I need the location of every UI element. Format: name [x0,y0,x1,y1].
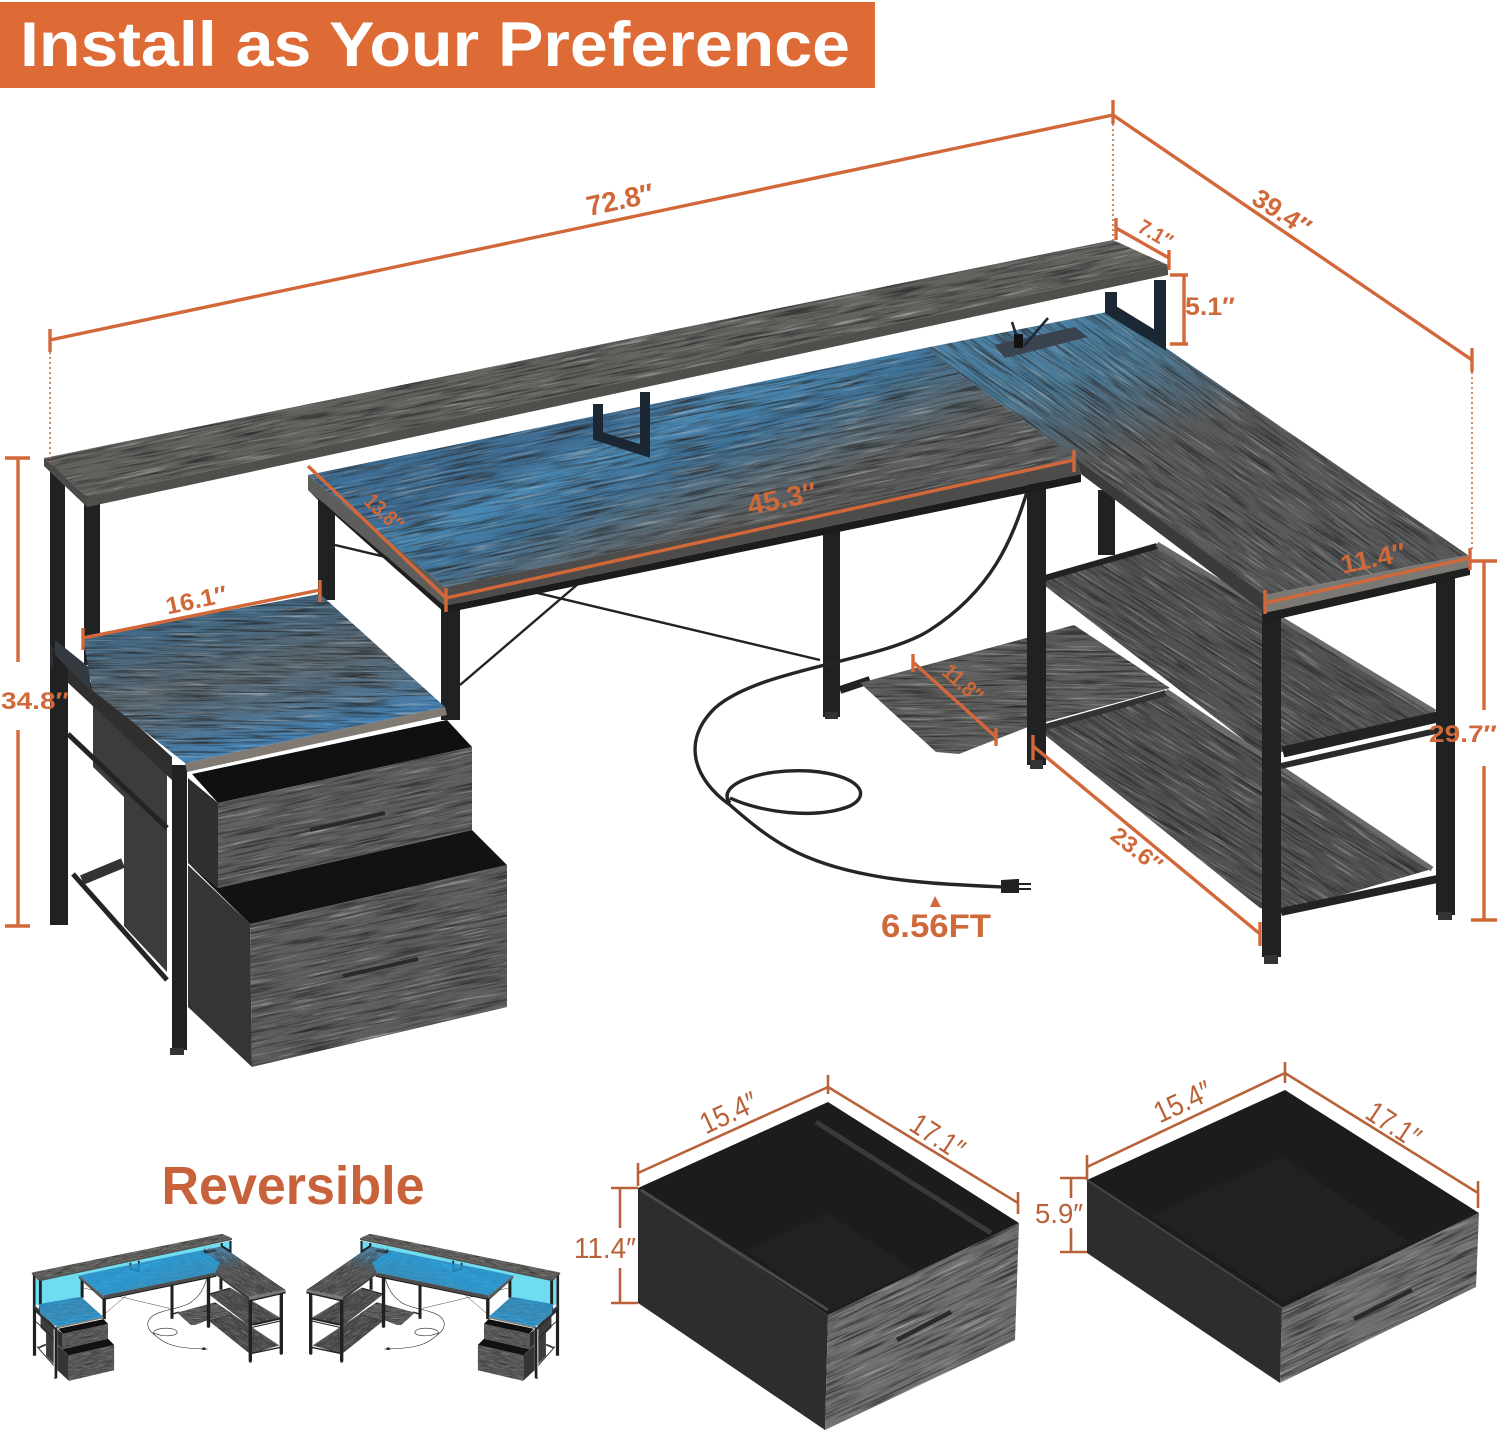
dimension 72.8 [50,100,1113,460]
dimension 39.4: 39.4″ [1247,182,1317,242]
dimension 16.1 [83,580,320,650]
dimension 11.8 [913,654,996,746]
dimension 39.4 [1113,115,1472,552]
storage shelf unit [904,352,1500,1108]
dimension 16.1: 16.1″ [163,581,230,620]
upper drawer [185,702,505,928]
lower keyboard shelf [780,560,1260,820]
bin side [1087,1180,1282,1383]
shallow drawer bin [1087,1090,1500,1387]
thumbnail: desk mirrored orientation [284,1208,582,1388]
dimension 34.8 [1,458,70,926]
left side frame and fabric panel [50,640,187,1055]
file drawer bin [638,1102,1019,1430]
riser front edge [87,265,1168,507]
power cord [695,492,1027,887]
bin side [638,1188,828,1430]
dimension 11.4 on return [1265,537,1470,614]
dimension 7.1: 7.1″ [1134,215,1177,253]
plug [1002,880,1031,892]
dimension 13.8 [308,466,446,598]
bin handle [897,1312,951,1340]
bin handle [1354,1290,1412,1319]
dimension 11.4 on return: 11.4″ [1338,537,1409,580]
dimension 7.1 [1116,215,1177,270]
hanging rails [816,1122,991,1233]
dimension 15.4 file bin: 15.4″ [695,1086,763,1141]
dimension 29.7: 29.7″ [1429,721,1498,748]
dimension 17.1 file bin: 17.1″ [904,1107,971,1167]
dimension 5.9: 5.9″ [1035,1198,1083,1229]
dimension 23.6: 23.6″ [1106,822,1168,878]
title banner: Install as Your Preference [20,10,850,80]
lower drawer [188,821,551,1109]
bin floor [1150,1157,1409,1302]
riser supports [598,280,1160,451]
bin interior [1087,1090,1479,1308]
bin interior [638,1102,1019,1315]
upper drawer handle [310,813,385,830]
dimension 29.7 [1429,561,1498,920]
dimension 5.1: 5.1″ [1185,293,1235,321]
lower storage shelf [904,502,1500,1108]
shelf frame [1027,480,1455,964]
main desktop with LED glow [217,162,1183,754]
thumbnail: desk left orientation [10,1208,308,1388]
dimension 15.4 shallow bin [1087,1062,1285,1180]
dimension 34.8: 34.8″ [1,688,70,715]
dimension 45.3 [446,450,1074,612]
L-shaped desk illustration [0,98,1500,1109]
dimension 13.8: 13.8″ [360,488,409,537]
dimension 17.1 shallow bin [1285,1073,1478,1208]
file cabinet top shelf [40,540,480,800]
desktop front edges [445,458,1081,606]
dimension 72.8: 72.8″ [584,177,657,222]
dimension 23.6 [1033,735,1260,946]
rear frame legs and cross braces [50,465,1115,925]
bin wood front [1280,1213,1479,1383]
bin wood front [825,1223,1019,1430]
dimension 11.4 file bin: 11.4″ [574,1233,636,1265]
bin floor [747,1213,915,1312]
dimension 5.1 [1170,275,1235,344]
dimension 45.3: 45.3″ [745,476,819,521]
desktop front edge [308,475,445,606]
L-return desktop [308,100,1500,811]
lower drawer handle [343,959,418,976]
dimension 15.4 file bin [638,1075,828,1186]
dimension 15.4 shallow bin: 15.4″ [1149,1075,1217,1130]
monitor riser top [0,98,1293,740]
heading: reversible: Reversible [162,1156,424,1216]
dimension 11.8: 11.8″ [938,659,989,708]
dimension 17.1 shallow bin: 17.1″ [1360,1095,1427,1155]
cord length label: 6.56FT [881,908,991,944]
dimension 11.4 file bin [574,1188,638,1303]
dimension 5.9 [1035,1178,1087,1252]
bin dimensions [574,1062,1478,1303]
power strip grommet [994,318,1088,358]
cord length label [881,896,991,944]
dimension annotations on desk [1,100,1498,946]
upper storage shelf [904,352,1500,958]
dimension 17.1 file bin [828,1087,1018,1214]
